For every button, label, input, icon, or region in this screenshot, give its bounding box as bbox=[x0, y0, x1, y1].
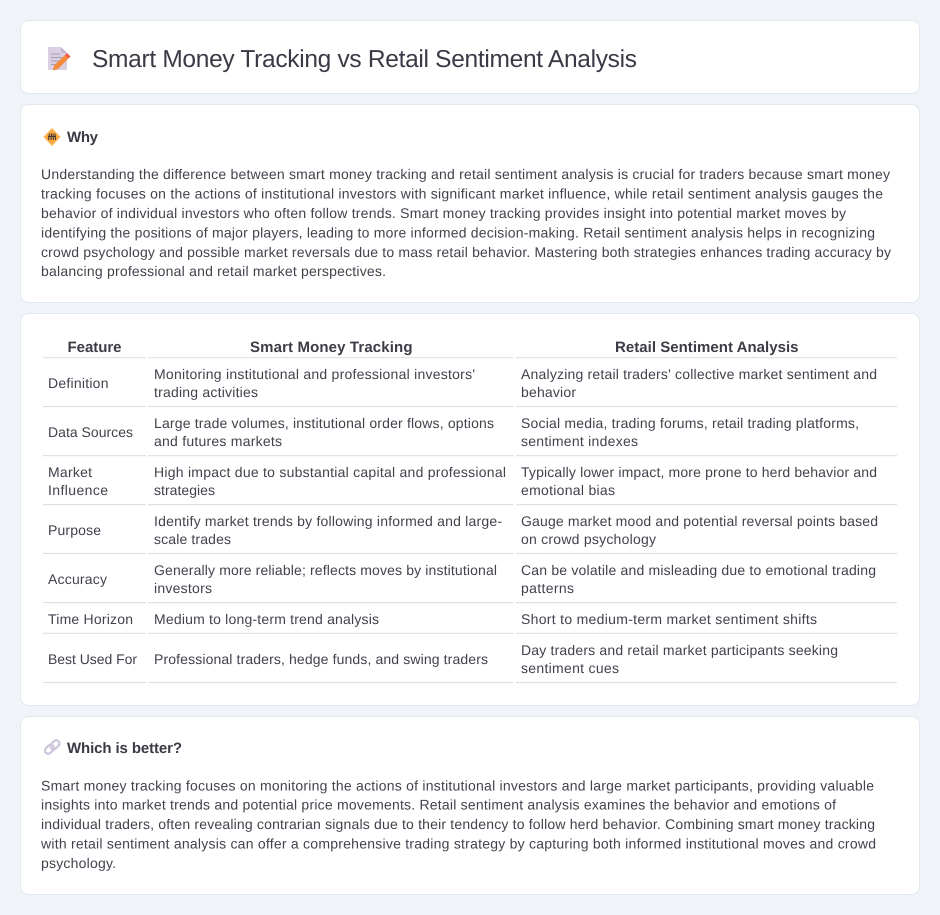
panel: title header bbox=[20, 20, 920, 94]
icon: link bbox=[44, 739, 61, 755]
table header row bbox=[68, 339, 798, 356]
table row: market influence: Influence bbox=[48, 482, 108, 498]
table row: definition: trading activities bbox=[154, 384, 258, 400]
title: Smart Money Tracking vs Retail Sentiment Analysis bbox=[92, 46, 637, 73]
table row: purpose: Purpose bbox=[48, 522, 101, 538]
table row: market influence: emotional bias bbox=[521, 482, 615, 498]
table row: purpose: on crowd psychology bbox=[521, 531, 656, 547]
table header row: Feature bbox=[68, 339, 122, 356]
text block: verdict: psychology. bbox=[41, 855, 116, 871]
table row: market influence: strategies bbox=[154, 482, 215, 498]
text block: verdict: insights into market trends and potential price movements. Retail sentiment analysis examines the behavior and emotions of bbox=[41, 796, 836, 812]
table row: time horizon: Short to medium-term market sentiment shifts bbox=[521, 611, 817, 627]
table row: market influence: Typically lower impact, more prone to herd behavior and bbox=[521, 464, 877, 480]
table row: accuracy bbox=[48, 562, 876, 596]
table row: accuracy: patterns bbox=[521, 580, 574, 596]
table row: purpose bbox=[48, 513, 878, 547]
table row: definition: behavior bbox=[521, 384, 576, 400]
text block: verdict: individual traders, often revealing contrarian signals due to their tendency to follow herd behavior. Combining smart money tracking bbox=[41, 816, 875, 832]
text block: verdict bbox=[40, 778, 876, 871]
text block: why explanation: crowd psychology and possible market reversals due to mass retail behavior. Mastering both strategies enhances trading accuracy by bbox=[41, 244, 891, 260]
panel: which is better bbox=[20, 716, 920, 894]
table row: market influence bbox=[48, 464, 877, 498]
table row: best used for: Professional traders, hedge funds, and swing traders bbox=[154, 651, 488, 667]
table row: purpose: scale trades bbox=[154, 531, 231, 547]
table row: market influence: Market bbox=[48, 464, 92, 480]
table row: data sources bbox=[48, 415, 859, 449]
table row: purpose: Identify market trends by following informed and large- bbox=[154, 513, 502, 529]
text block: why explanation: tracking focuses on the actions of institutional investors with significant market influence, while retail sentiment analysis gauges the bbox=[41, 186, 883, 202]
table row: best used for: sentiment cues bbox=[521, 660, 619, 676]
icon: warning diamond bbox=[44, 128, 60, 146]
table row: market influence: High impact due to substantial capital and professional bbox=[154, 464, 506, 480]
table header row: Smart Money Tracking bbox=[250, 339, 412, 356]
table row: data sources: and futures markets bbox=[154, 433, 282, 449]
table row: best used for: Day traders and retail market participants seeking bbox=[521, 642, 838, 658]
table row: data sources: sentiment indexes bbox=[521, 433, 638, 449]
text block: why explanation: identifying the positions of major players, leading to more informed decision-making. Retail sentiment analysis helps in recognizing bbox=[41, 224, 875, 240]
table row: data sources: Data Sources bbox=[48, 424, 133, 440]
text block: why explanation bbox=[41, 166, 891, 279]
table row: accuracy: Accuracy bbox=[48, 571, 107, 587]
icon: document with pencil bbox=[48, 47, 70, 70]
text block: verdict: Smart money tracking focuses on monitoring the actions of institutional investors and large market participants, providing valuable bbox=[41, 778, 874, 794]
table row: data sources: Social media, trading forums, retail trading platforms, bbox=[521, 415, 859, 431]
table row: time horizon: Medium to long-term trend analysis bbox=[154, 611, 379, 627]
table header row: Retail Sentiment Analysis bbox=[615, 339, 798, 356]
panel: why bbox=[20, 104, 920, 302]
table row: definition bbox=[48, 366, 877, 400]
table row: accuracy: Generally more reliable; reflects moves by institutional bbox=[154, 562, 497, 578]
table row: best used for: Best Used For bbox=[48, 651, 137, 667]
table row: definition: Monitoring institutional and professional investors' bbox=[154, 366, 475, 382]
table row: data sources: Large trade volumes, institutional order flows, options bbox=[154, 415, 494, 431]
text block: verdict: with retail sentiment analysis can offer a comprehensive trading strategy by capturing both informed institutional moves and crowd bbox=[40, 836, 876, 852]
table row: best used for bbox=[48, 642, 838, 676]
table row: time horizon: Time Horizon bbox=[48, 611, 133, 627]
table row: time horizon bbox=[48, 611, 817, 627]
text block: why explanation: behavior of individual investors who often follow trends. Smart money tracking provides insight into potential market moves by bbox=[41, 205, 846, 221]
heading: why: Why bbox=[67, 129, 99, 146]
table row: definition: Definition bbox=[48, 375, 108, 391]
table row: accuracy: Can be volatile and misleading due to emotional trading bbox=[521, 562, 876, 578]
table row: accuracy: investors bbox=[154, 580, 212, 596]
heading: which is better: Which is better? bbox=[67, 740, 182, 757]
panel: comparison table bbox=[20, 314, 920, 706]
table row: definition: Analyzing retail traders' collective market sentiment and bbox=[521, 366, 877, 382]
table row: purpose: Gauge market mood and potential reversal points based bbox=[521, 513, 878, 529]
text block: why explanation: balancing professional and retail market perspectives. bbox=[41, 263, 386, 279]
text block: why explanation: Understanding the difference between smart money tracking and retail sentiment analysis is crucial for traders because smart money bbox=[41, 166, 890, 182]
